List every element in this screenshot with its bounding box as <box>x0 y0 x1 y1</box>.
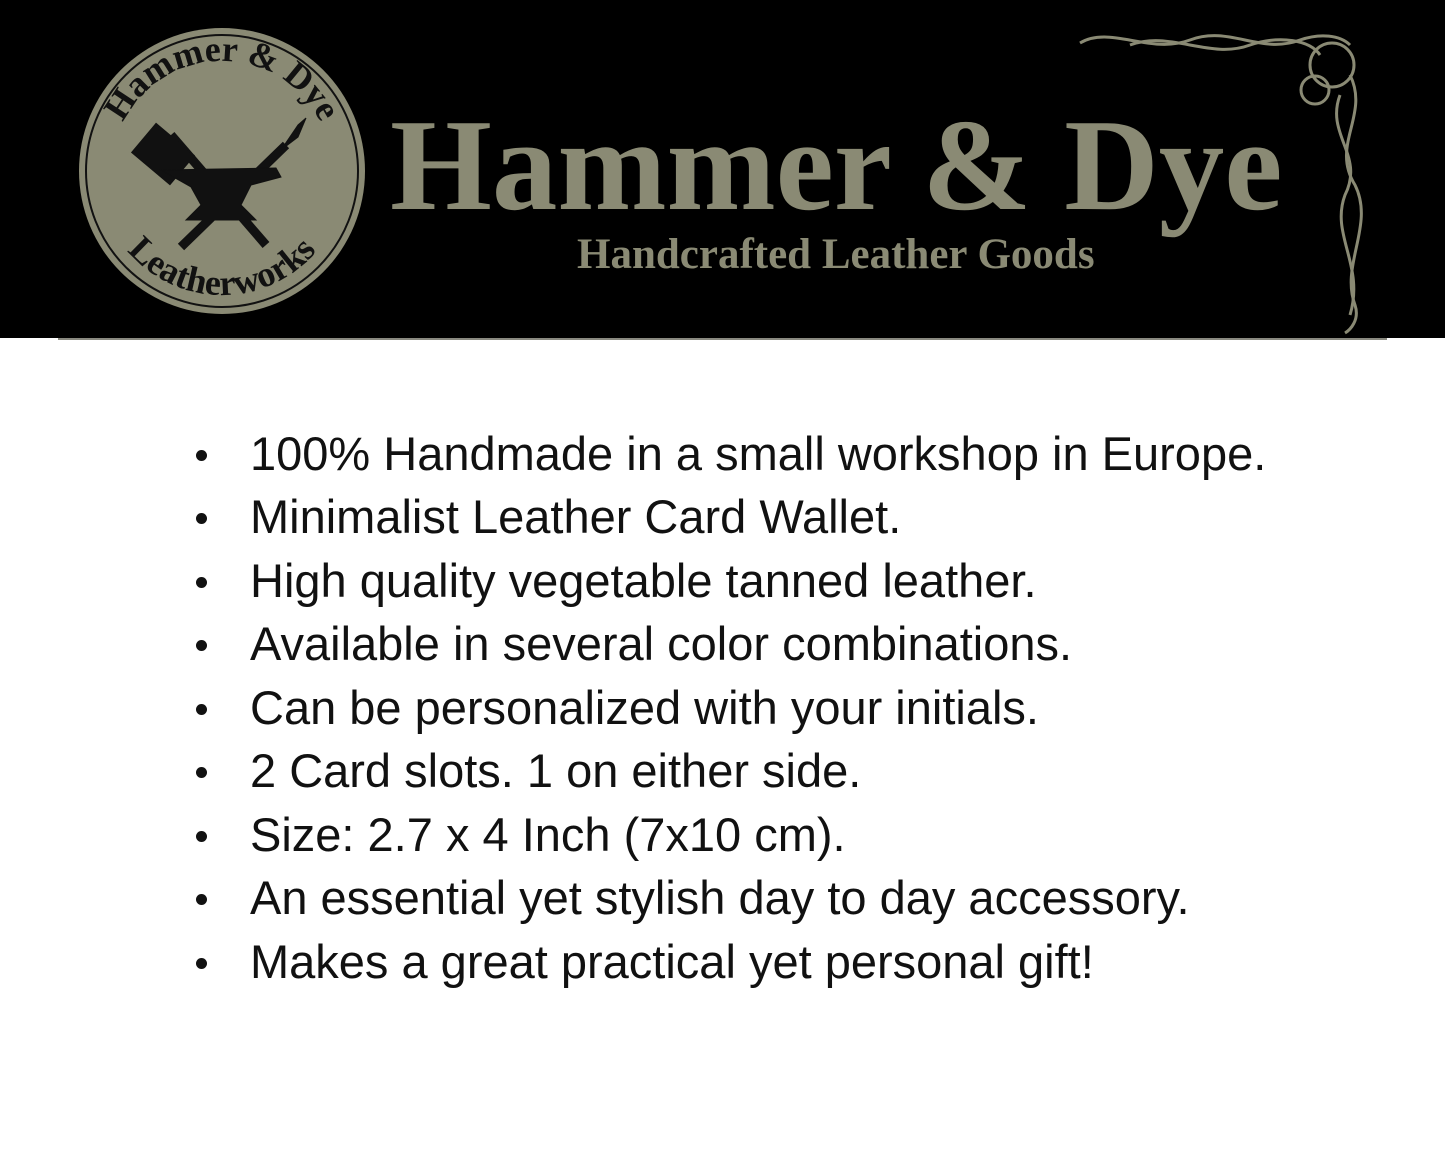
text: Minimalist Leather Card Wallet. <box>250 490 901 543</box>
text: 2 Card slots. 1 on either side. <box>250 744 861 797</box>
feature list <box>196 427 1266 988</box>
text: Can be personalized with your initials. <box>250 681 1039 734</box>
logo <box>79 28 365 314</box>
logo: Leatherworks <box>127 234 314 296</box>
logo: Hammer & Dye <box>103 44 334 122</box>
text: An essential yet stylish day to day accessory. <box>250 871 1190 924</box>
text: 100% Handmade in a small workshop in Europe. <box>250 427 1266 480</box>
header band <box>0 0 1445 338</box>
title: Hammer & Dye <box>390 93 1282 238</box>
subtitle: Handcrafted Leather Goods <box>577 231 1095 278</box>
text: Makes a great practical yet personal gift! <box>250 935 1094 988</box>
text: Available in several color combinations. <box>250 617 1072 670</box>
text: Size: 2.7 x 4 Inch (7x10 cm). <box>250 808 846 861</box>
text: High quality vegetable tanned leather. <box>250 554 1037 607</box>
ornament: celtic vine corner <box>1079 34 1363 334</box>
